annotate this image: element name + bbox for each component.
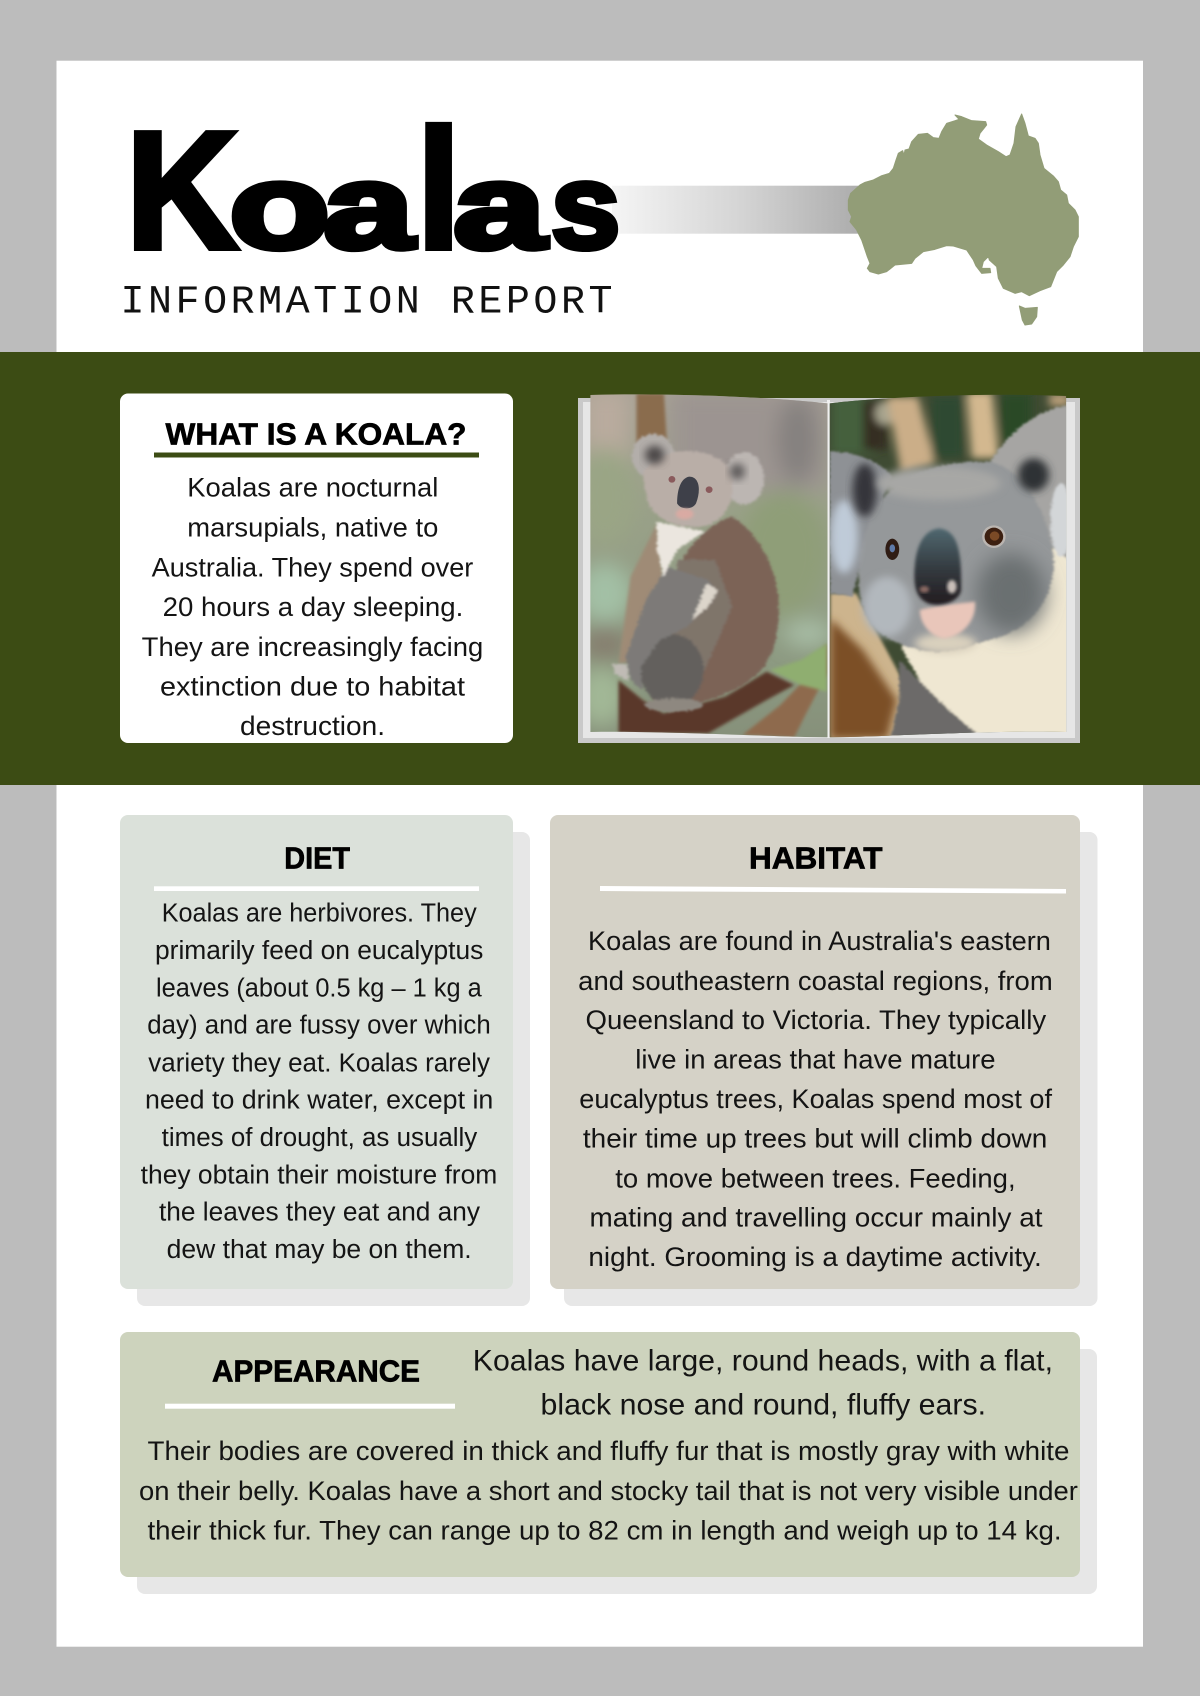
header [120, 95, 1078, 326]
neck fur [891, 660, 978, 737]
body text: their time up trees but will climb down [583, 1124, 1047, 1154]
body text: Queensland to Victoria. They typically [586, 1005, 1047, 1035]
trunk behind body [619, 523, 663, 663]
body text [141, 900, 497, 1264]
subtitle: INFORMATION REPORT [120, 280, 612, 326]
body text: extinction due to habitat [160, 671, 466, 701]
nose [914, 528, 961, 605]
body text: their thick fur. They can range up to 82 cm in length and weigh up to 14 kg. [148, 1515, 1062, 1545]
head [643, 451, 732, 527]
card shadow [137, 1349, 1097, 1594]
title: a [324, 140, 415, 274]
heading rule [165, 1404, 455, 1409]
panel: what is a koala [120, 394, 513, 743]
card background [120, 1332, 1080, 1577]
intro text: black nose and round, fluffy ears. [540, 1388, 986, 1421]
left ear [830, 452, 892, 597]
eyes [885, 539, 899, 560]
title: o [229, 140, 330, 274]
heading rule [600, 886, 1066, 894]
book pages [583, 402, 1075, 738]
body text: Koalas are found in Australia's eastern [588, 926, 1051, 956]
haunch [640, 634, 704, 706]
eyes [668, 476, 675, 483]
body text [139, 1436, 1078, 1545]
body text: variety they eat. Koalas rarely [148, 1049, 490, 1077]
body text: they obtain their moisture from [141, 1161, 497, 1189]
body text: Koalas are herbivores. They [162, 900, 477, 928]
book cover [578, 398, 1080, 743]
main branch [619, 672, 794, 733]
body text: the leaves they eat and any [159, 1199, 480, 1227]
body text: live in areas that have mature [635, 1044, 996, 1074]
photo book [574, 390, 1080, 743]
muzzle [920, 602, 975, 638]
nose [677, 477, 699, 508]
card background [550, 815, 1080, 1289]
body text: and southeastern coastal regions, from [578, 966, 1053, 996]
claws [612, 664, 629, 682]
chin [915, 633, 977, 653]
chest [656, 522, 705, 577]
card shadow [564, 832, 1098, 1306]
body text: need to drink water, except in [145, 1087, 493, 1115]
card background [120, 815, 513, 1289]
nostrils [947, 580, 957, 593]
title: l [417, 95, 460, 285]
card background [120, 394, 513, 743]
heading: APPEARANCE [212, 1354, 420, 1389]
body text: dew that may be on them. [167, 1236, 472, 1264]
photo: full koala on branch [574, 390, 832, 740]
right ear [990, 405, 1070, 560]
gutter [827, 400, 830, 738]
panel: appearance [120, 1332, 1097, 1594]
head [859, 462, 1054, 652]
body text: 20 hours a day sleeping. [163, 592, 463, 622]
heading rule [154, 886, 479, 891]
body text: destruction. [240, 711, 385, 741]
photo: koala close-up [829, 390, 1071, 740]
body text: leaves (about 0.5 kg – 1 kg a [156, 974, 483, 1002]
green band [0, 352, 1200, 785]
panel: habitat [550, 815, 1098, 1306]
body text: Australia. They spend over [152, 553, 473, 583]
heading: WHAT IS A KOALA? [166, 416, 466, 451]
body text: Koalas are nocturnal [187, 473, 438, 503]
gradient bar [612, 186, 872, 234]
heading rule [154, 452, 479, 458]
card shadow [137, 832, 530, 1306]
heading: DIET [284, 840, 350, 875]
title: s [551, 140, 620, 274]
intro text: Koalas have large, round heads, with a flat, [473, 1345, 1053, 1378]
body text: on their belly. Koalas have a short and stocky tail that is not very visible under [139, 1476, 1078, 1506]
body text: marsupials, native to [187, 513, 438, 543]
body text: Their bodies are covered in thick and fluffy fur that is mostly gray with white [148, 1436, 1069, 1466]
body text: eucalyptus trees, Koalas spend most of [579, 1084, 1053, 1114]
body text: times of drought, as usually [162, 1124, 478, 1152]
panel: diet [120, 815, 530, 1306]
title: a [453, 140, 547, 274]
icon: map of Australia [848, 114, 1078, 325]
body [682, 516, 780, 702]
title: K [126, 98, 238, 284]
chest fur [901, 540, 1070, 735]
body text: They are increasingly facing [142, 632, 483, 662]
body text: to move between trees. Feeding, [615, 1163, 1016, 1193]
lower branch [743, 643, 827, 737]
intro text [473, 1345, 1053, 1421]
ears [632, 434, 674, 478]
body text: mating and travelling occur mainly at [590, 1203, 1043, 1233]
wooden branches [830, 593, 908, 738]
body text: day) and are fussy over which [147, 1012, 491, 1040]
body text [578, 926, 1053, 1272]
heading: HABITAT [749, 840, 883, 875]
body text [142, 473, 483, 741]
body text: primarily feed on eucalyptus [155, 937, 483, 965]
body text: night. Grooming is a daytime activity. [588, 1242, 1042, 1272]
tree trunk [636, 393, 667, 447]
arm [625, 567, 717, 690]
mouth [676, 509, 694, 519]
